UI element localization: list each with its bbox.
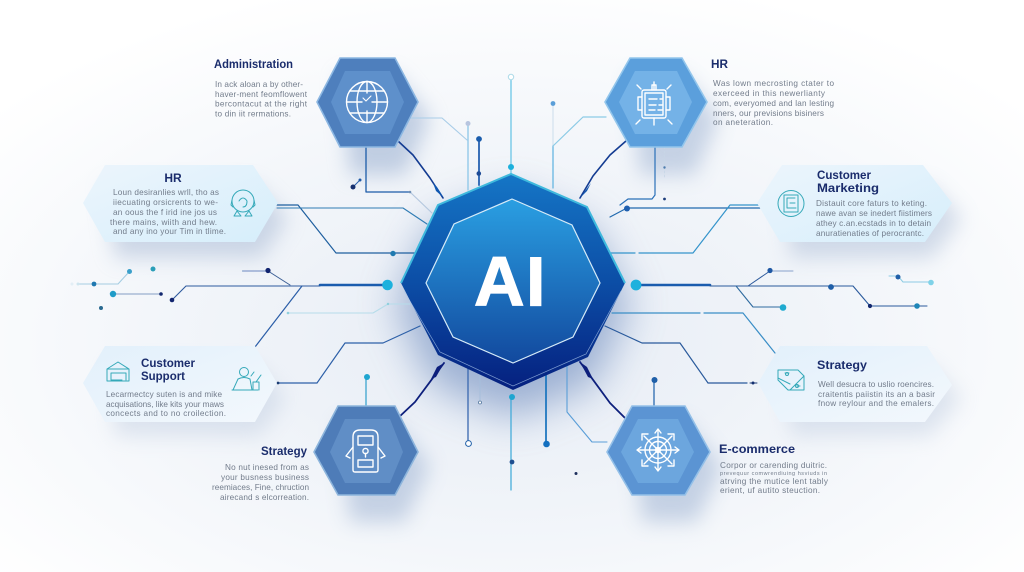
icon: compass wheel	[637, 429, 679, 471]
text: HR right: on aneteration.	[713, 118, 773, 127]
text: E-commerce: erient, uf autito steuction.	[720, 486, 820, 495]
text: Strategy left: your busness business	[221, 473, 309, 482]
text block: Customer Marketing: nawe avan se inedert fiistimers	[816, 209, 932, 218]
text: Strategy left: Strategy	[261, 444, 307, 458]
text block: HR left: an oous the f irid ine jos us	[113, 208, 217, 217]
text: Administration: In ack aloan a by other-	[215, 80, 303, 89]
text block: Customer Support: Lecarmectcy suten is and mike	[106, 390, 222, 399]
heading: Customer Support: Support	[141, 369, 185, 383]
text: Administration: to din iit rermations.	[215, 110, 291, 118]
text block: Customer Marketing	[816, 199, 932, 238]
text block: Customer Marketing: athey c.an.ecstads in to detain	[816, 219, 931, 228]
panel: Customer Marketing	[757, 165, 952, 242]
circuit lines: top	[398, 74, 626, 198]
icon: globe	[346, 82, 388, 122]
text block: Customer Support	[106, 390, 226, 418]
icon: support agent	[232, 368, 261, 390]
central AI octagon	[401, 174, 625, 390]
text: HR right: Was lown mecrosting ctater to	[713, 79, 834, 88]
text: E-commerce	[719, 442, 829, 495]
hexagon: Administration globe	[317, 58, 418, 147]
text block: Strategy right: fnow reylour and the emalers.	[818, 399, 934, 408]
text: E-commerce: atrving the mutice lent tably	[720, 477, 829, 486]
icon: strategy board	[778, 370, 804, 390]
text: Strategy left: No nut inesed from as	[225, 463, 309, 472]
text: Administration: Administration	[214, 57, 293, 71]
text: HR right: com, everyomed and lan lesting	[713, 99, 834, 108]
text block: HR left: and any ino your Tim in tlime.	[113, 227, 226, 236]
text block: Strategy right	[818, 380, 935, 408]
heading: Strategy right: Strategy	[817, 358, 867, 372]
text block: Strategy right: craitentis paiistin its an a basir	[818, 390, 935, 399]
text: HR right	[711, 57, 834, 127]
text block: HR left: Loun desiranlies wrll, tho as	[113, 188, 219, 197]
text block: HR left: there mains, wiith and hew.	[110, 218, 217, 227]
text: HR right: HR	[711, 57, 728, 71]
panel: HR left	[83, 165, 278, 242]
text: E-commerce: prevequur comwrendiuing hsviuds in	[720, 471, 827, 477]
text block: Customer Marketing: Distauit core faturs to keting.	[816, 199, 927, 208]
text: Strategy left: reemiaces, Fine, chruction	[212, 483, 309, 492]
hexagon: E-commerce wheel	[607, 406, 710, 495]
icon: envelope	[107, 362, 129, 381]
text: Administration: haver-ment feomflowent	[215, 90, 308, 99]
text: Administration	[214, 57, 308, 118]
panel: Customer Support	[83, 346, 277, 422]
heading: Customer Marketing: Marketing	[817, 181, 879, 195]
text block: HR left: iiecuating orsicrents to we-	[113, 198, 218, 207]
heading: HR: HR	[164, 171, 182, 185]
heading: Customer Support: Customer	[141, 356, 195, 370]
text: HR right: nners, our previsions bisiners	[713, 109, 824, 118]
heading: Customer Marketing: Customer	[817, 168, 871, 182]
icon: lock case	[346, 430, 385, 472]
text: HR right: exerceed in this newerlianty	[713, 89, 826, 98]
heading: Customer Marketing	[817, 168, 879, 195]
text: Strategy left	[212, 444, 309, 502]
hexagon: HR clipboard	[605, 58, 707, 147]
icon: box in circle	[778, 190, 804, 216]
text: E-commerce: Corpor or carending duitric.	[720, 461, 827, 470]
circuit lines: bottom	[364, 355, 658, 490]
hexagon: Strategy lock	[314, 406, 418, 495]
text block: Customer Marketing: anuratienaties of perocrantc.	[816, 229, 924, 238]
circuit lines: right side	[605, 147, 934, 384]
icon: headset face	[231, 190, 255, 216]
icon: clipboard with arrows	[636, 82, 672, 125]
panel: Strategy right	[758, 346, 952, 422]
text: E-commerce: E-commerce	[719, 442, 795, 456]
text: Administration: bercontacut at the right	[215, 100, 308, 108]
text block: Strategy right: Well desucra to uslio roencires.	[818, 380, 934, 389]
heading: Customer Support	[141, 356, 195, 383]
AI label: AI	[474, 242, 545, 320]
text block: Customer Support: acquisations, like kits your maws	[106, 400, 224, 409]
text: Strategy left: airecand s elcorreation.	[220, 493, 309, 502]
circuit lines: left side	[70, 147, 432, 384]
text block: Customer Support: concects and to no croilection.	[106, 409, 226, 418]
text block: HR left	[110, 188, 226, 236]
